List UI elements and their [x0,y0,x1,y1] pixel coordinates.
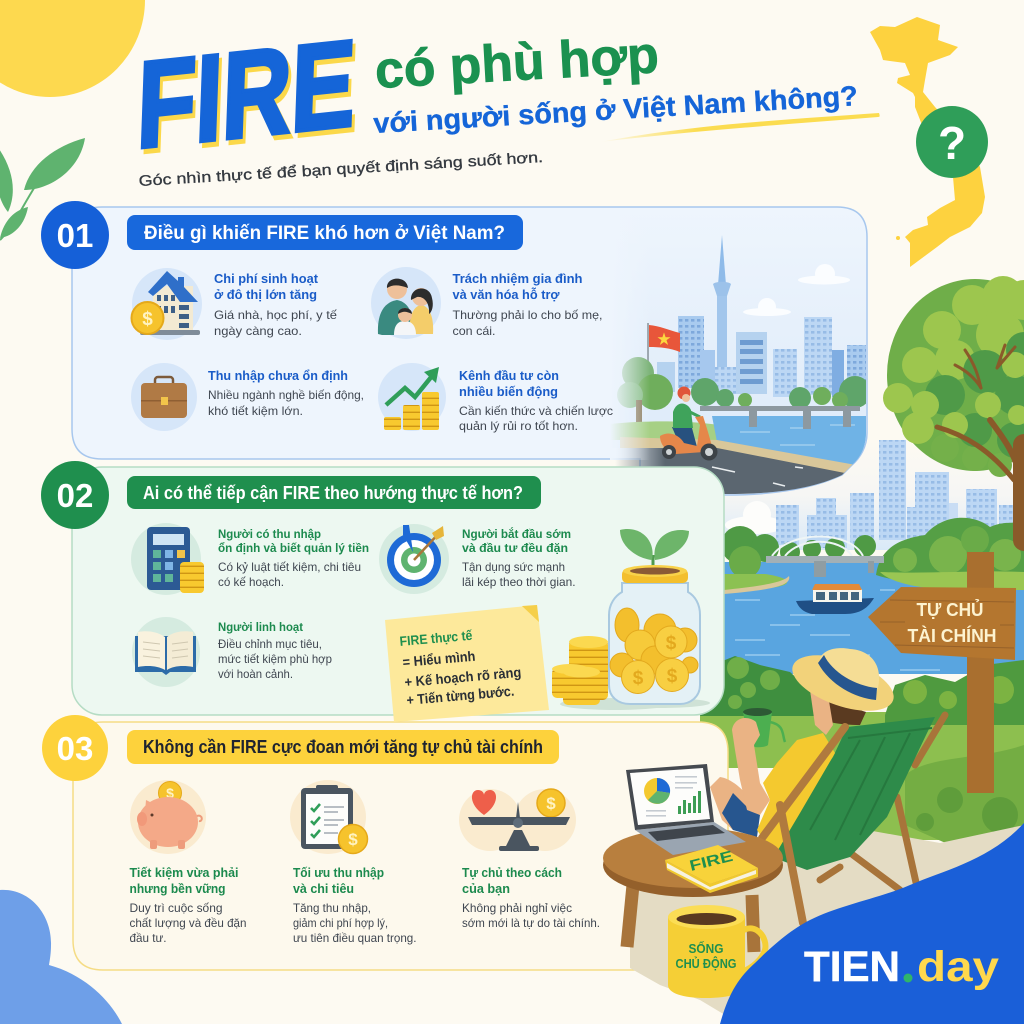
icon: balance scale: $ [546,794,556,813]
item: optimize [290,780,416,945]
icon: open book [132,617,200,687]
panel 03 [42,715,728,970]
heading bar 03 [127,730,559,764]
bar chart [678,791,701,814]
section number 01: 01 [57,217,93,254]
signpost [868,552,1016,793]
decoration: leaf branch [0,138,85,240]
text [218,527,369,589]
text: Tận dụng sức mạnh [462,560,565,574]
text: Người linh hoạt [218,620,303,634]
sticky note: + Kế hoạch rõ ràng [404,664,522,690]
sticky note: FIRE thực tế [399,628,473,649]
table top [603,833,783,897]
tree highlights [911,352,1024,438]
water [700,562,1024,674]
city buildings [657,235,867,397]
jar coin symbols: $ [667,666,678,687]
brand corner [720,823,1024,1024]
panel 02 card [72,467,724,715]
road [618,448,846,494]
clouds [743,264,850,316]
title line: có phù hợp: có phù hợp [373,26,660,100]
icon: briefcase [131,363,197,431]
far left bank [724,574,788,590]
item: autonomy [459,789,600,930]
icon: growth chart [378,363,446,431]
tree line left [721,526,876,578]
table legs [627,885,754,952]
panel 02 [41,461,724,722]
mug sống chủ động: SỐNG [688,941,724,956]
text: Tự chủ theo cách [462,865,562,880]
item: start early [379,524,576,594]
relaxing person on deck chair [710,644,945,923]
river highlights [740,425,855,445]
item: living cost [132,268,337,340]
heading bar 03: Không cần FIRE cực đoan mới tăng tự chủ tài chính [143,737,543,757]
section number 02: 02 [57,477,93,514]
left lawn [613,421,717,440]
sticky note [385,605,549,722]
foreground tree [883,276,1024,540]
bushes left [700,656,815,716]
signpost: TÀI CHÍNH [908,625,996,646]
text [462,526,576,589]
icon: target and dart [379,524,449,594]
text [218,620,332,681]
panel 01 card [72,207,867,495]
panel 01 [41,201,871,495]
icon: house and coin [132,268,202,340]
jar coin symbols: $ [633,668,644,689]
text: Kênh đầu tư còn [459,368,559,383]
heading bar 01 [127,215,523,250]
item: investing [378,363,613,433]
city sky [632,330,866,448]
heading bar 02: Ai có thể tiếp cận FIRE theo hướng thực tế hơn? [143,483,523,503]
text [459,368,613,433]
subtitle: Góc nhìn thực tế để bạn quyết định sáng suốt hơn. [138,149,544,190]
text: với hoàn cảnh. [218,667,293,681]
icon: piggy bank: $ [166,785,174,801]
laptop [626,764,746,855]
title underline swoosh [600,113,880,142]
table with laptop and book [603,764,783,952]
far bridge [766,536,884,577]
title line: với người sống: với người sống ở Việt Nam không? [373,80,859,139]
text: Thu nhập chưa ổn định [208,368,348,383]
boat [796,584,874,614]
water highlights [735,590,940,670]
jar glass [609,583,700,704]
Vietnam flag [647,323,680,365]
sprout [620,529,689,572]
tree trunk and branches [937,345,1024,540]
far left bank kerb [724,576,789,594]
text: Giá nhà, học phí, y tế [214,308,337,322]
far right bank [880,571,1024,590]
cloud [725,501,776,534]
icon: family [371,267,441,339]
jar coin symbols: $ [666,633,677,654]
section number 01 [41,201,109,269]
question badge: ? [938,117,966,169]
decoration: blue cloud corner [0,890,122,1024]
decoration: yellow sun corner [0,0,145,97]
text: ổn định và biết quản lý tiền [218,541,369,555]
sticky note: = Hiểu mình [402,648,476,670]
tree canopy outer [883,276,1024,477]
text: Tối ưu thu nhập [293,865,384,880]
text [293,865,416,945]
text: và đầu tư đều đặn [462,541,568,555]
title [135,13,859,179]
thigh [710,777,750,830]
text: Người bắt đầu sớm [462,526,571,541]
riverbank kerb [620,437,856,474]
text: Không phải nghỉ việc [462,901,572,915]
item: saving [130,780,246,945]
text [214,271,337,338]
head and hair [810,690,866,735]
building windows [740,340,763,384]
text: Trách nhiệm gia đình [452,271,583,286]
sky [724,497,1013,550]
text: lãi kép theo thời gian. [462,575,576,589]
text: quản lý rủi ro tốt hơn. [459,419,578,433]
icon: calculator [131,523,204,595]
sign text: TỰ CHỦ [916,599,984,620]
text: ở đô thị lớn tăng [214,287,317,302]
item: stable income [131,523,369,595]
grass [700,712,1024,840]
torso [757,733,835,850]
FIRE book: FIRE [688,848,735,875]
text: Điều chỉnh mục tiêu, [218,637,322,651]
text: giảm chi phí hợp lý, [293,916,388,930]
riverside scene background [700,440,1024,845]
item: flexible [132,617,332,687]
text [208,368,364,418]
pie chart [644,778,670,804]
mug in hand [743,708,785,747]
title word: FIRE: FIRE [135,14,358,174]
icon: piggy bank [130,780,206,854]
section number 03 [42,715,108,781]
text: Tiết kiệm vừa phải [130,865,238,880]
text: ngày càng cao. [214,324,302,338]
shorts [722,793,760,837]
text: nhiều biến động [459,384,558,399]
logo: day [917,943,999,991]
straw hat [785,644,901,722]
scooter rider [660,386,718,460]
chair front frame [762,727,845,923]
wood grain [880,600,1014,648]
mug sống chủ động [668,905,765,998]
heading bar 01: Điều gì khiến FIRE khó hơn ở Việt Nam? [144,223,505,244]
text lines [646,776,697,817]
logo: TIEN [804,943,900,991]
text: Chi phí sinh hoạt [214,271,319,286]
jar lid [622,569,688,583]
text [130,865,246,945]
text: chất lượng và đều đặn [130,916,246,930]
jar coin symbols [633,633,678,689]
text: sớm mới là tự do tài chính. [462,916,600,930]
city illustration [610,236,866,494]
text: Duy trì cuộc sống [130,901,222,915]
road markings [712,467,803,486]
river [712,416,867,470]
text: Cần kiến thức và chiến lược [459,404,613,418]
icon: balance scale [459,789,576,851]
icon: clipboard [290,780,368,854]
text [452,271,602,338]
mug sống chủ động: CHỦ ĐỘNG [676,956,736,971]
arm [732,718,770,815]
stone path [630,825,1024,1024]
fade overlay [610,331,648,460]
section number 02 [41,461,109,529]
arrow board [868,587,1016,660]
map of Vietnam [870,17,985,267]
text: mức tiết kiệm phù hợp [218,652,332,666]
item: family [371,267,602,339]
text: Có kỷ luật tiết kiệm, chi tiêu [218,560,361,574]
heading bar 02 [127,476,541,509]
text: Người có thu nhập [218,527,321,541]
FIRE book [665,845,758,893]
text: đầu tư. [130,931,166,945]
chair canvas [770,717,935,870]
bushes right [885,660,1024,725]
map island [896,236,900,240]
river bridge [700,406,860,429]
text: Thường phải lo cho bố mẹ, [452,308,602,322]
chair rear frame [820,715,945,890]
text: nhưng bền vững [130,881,226,896]
jar coins [610,608,698,694]
post [967,552,994,793]
question badge [916,106,988,178]
title word: FIRE: FIRE [138,18,361,179]
park trees [617,357,871,425]
Vietnam flag: ★ [657,331,671,347]
text: con cái. [452,324,496,338]
text: và văn hóa hỗ trợ [452,287,560,302]
chair canvas shading [810,728,932,840]
panel 03 card [73,722,728,970]
coin stacks [552,636,670,710]
text: Tăng thu nhập, [293,901,371,915]
hillside trees right [876,518,1024,584]
text: khó tiết kiệm lớn. [208,404,303,418]
distant skyline [776,440,1017,550]
text: ưu tiên điều quan trọng. [293,931,416,945]
logo [804,943,999,991]
item: income [131,363,364,431]
text: của bạn [462,881,510,896]
text: Nhiều ngành nghề biến động, [208,388,364,402]
bushes lower right [905,745,1024,845]
section number 03: 03 [57,730,93,767]
tree canopy inner [925,332,1024,458]
icon: house and coin: $ [142,309,153,330]
text: có kế hoạch. [218,575,284,589]
text: và chi tiêu [293,881,354,896]
icon: clipboard: $ [348,830,358,849]
text [462,865,600,930]
jar with coins and sprout [609,529,710,708]
tree canopy base [887,279,1024,471]
sticky note: + Tiến từng bước. [406,683,515,708]
